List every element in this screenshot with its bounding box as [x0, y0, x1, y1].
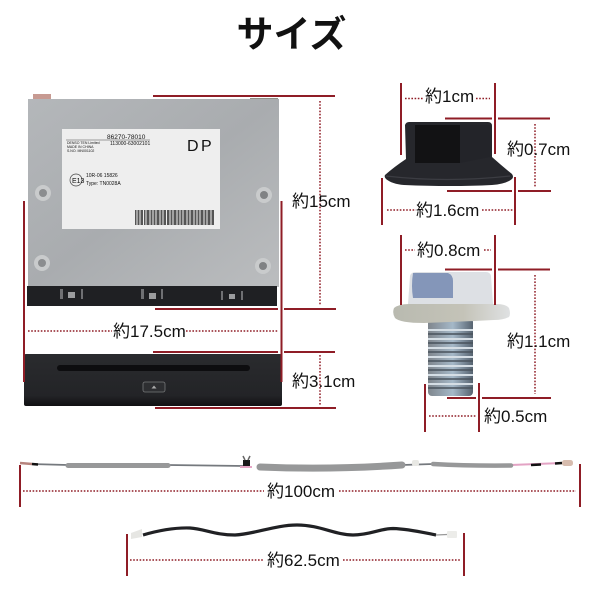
- device label sticker: DENSO TEN Limited: [67, 141, 100, 145]
- label: 0.8cm: 約0.8cm: [417, 241, 480, 260]
- barcode: [135, 210, 214, 225]
- dimension: short cable: [127, 533, 464, 576]
- black rear strip: [27, 286, 277, 306]
- nut: [385, 122, 513, 186]
- label: 100cm: 約100cm: [267, 482, 335, 501]
- bolt head: [408, 272, 493, 304]
- label: height 3.1cm: 約3.1cm: [292, 372, 355, 391]
- long cable: [20, 456, 573, 468]
- short black cable: [131, 525, 457, 539]
- device: rear metal unit: [27, 94, 279, 306]
- dimension: long cable: [20, 464, 580, 507]
- label: 1cm: 約1cm: [425, 87, 474, 106]
- label: 0.7cm: 約0.7cm: [507, 140, 570, 159]
- title: サイズ: [237, 4, 346, 58]
- dimensions: device: [24, 96, 355, 408]
- device label sticker: S.NO. MN001102: [67, 149, 94, 153]
- bolt thread: [428, 318, 473, 396]
- device label sticker: DP: [187, 138, 214, 155]
- dimensions: bolt: [401, 235, 570, 432]
- screws: [34, 185, 272, 274]
- device label sticker: 10R-06 15826: [86, 173, 118, 179]
- device label sticker: MADE IN CHINA: [67, 145, 94, 149]
- device label sticker: 113000-63002101: [110, 141, 150, 147]
- device: front panel: [24, 354, 282, 406]
- device label sticker: E13: [72, 178, 85, 185]
- label: width 17.5cm: 約17.5cm: [113, 322, 186, 341]
- label: 1.6cm: 約1.6cm: [416, 201, 479, 220]
- label: 1.1cm: 約1.1cm: [507, 332, 570, 351]
- label: height 15cm: 約15cm: [292, 192, 351, 211]
- device label sticker: [62, 129, 220, 229]
- eject button: [143, 382, 165, 392]
- device label sticker: 86270-78010: [107, 134, 146, 141]
- label: 62.5cm: 約62.5cm: [267, 551, 340, 570]
- label: 0.5cm: 約0.5cm: [484, 407, 547, 426]
- bolt: [393, 272, 510, 396]
- device label sticker: Type: TN0028A: [86, 181, 121, 187]
- dimensions: nut: [382, 83, 570, 225]
